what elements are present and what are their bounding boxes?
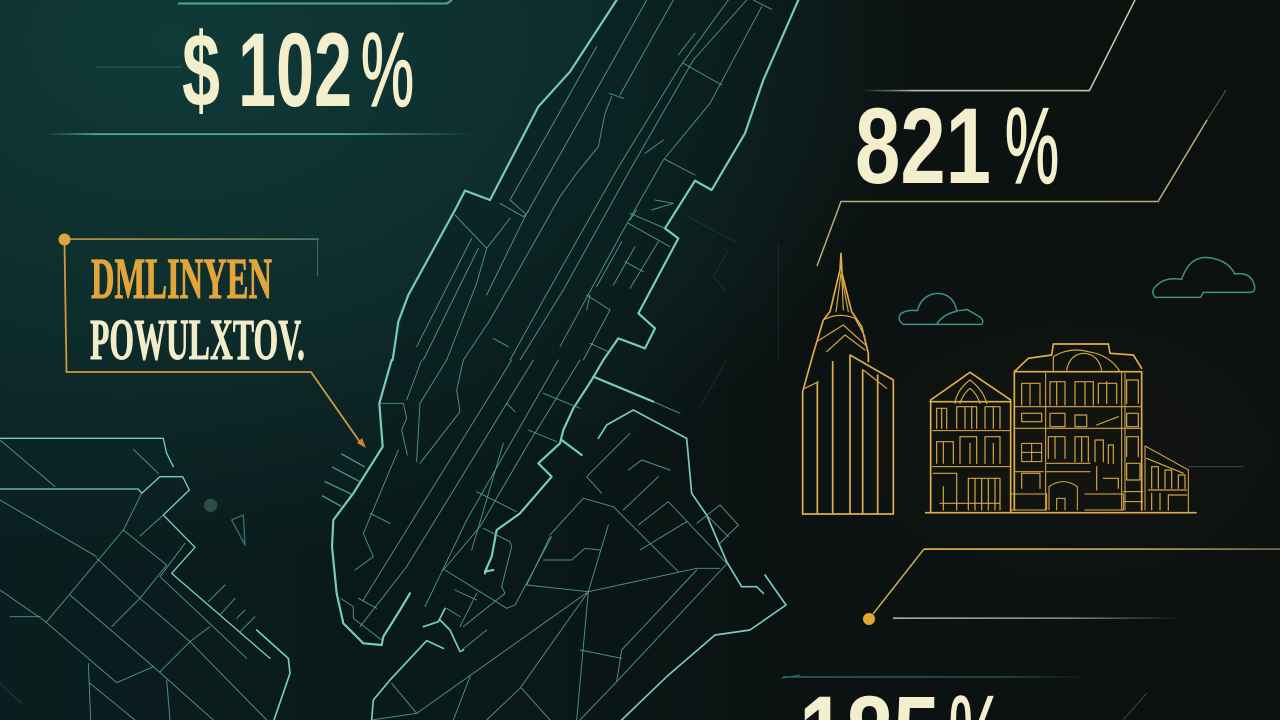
callout: population label: DMLINYEN (91, 246, 272, 311)
icon: skyscraper (803, 253, 893, 514)
top-left stat: dollar percent: $ (182, 12, 220, 129)
stat: bottom right percent (783, 673, 1147, 720)
icon: cloud right (1153, 257, 1255, 297)
icon: cloud left (899, 293, 983, 324)
callout: population label: POWULXTOV. (90, 307, 305, 372)
map: left district (0, 438, 290, 720)
callout: population label (58, 234, 366, 448)
connector: gold leader with dot (863, 548, 1280, 625)
map: Manhattan interior shade (333, 0, 798, 645)
top-left stat: dollar percent (45, 0, 475, 135)
map: lower Manhattan and Brooklyn (323, 360, 800, 720)
connector frame: top right (858, 0, 1135, 91)
stat: 821 percent: % (1005, 85, 1059, 206)
map: upper Manhattan (393, 0, 798, 360)
top-left stat: dollar percent: 102 (238, 12, 352, 129)
icon: city buildings (926, 344, 1243, 513)
stat: 821 percent: 821 (855, 85, 991, 206)
top-left stat: dollar percent: % (361, 12, 414, 129)
connector frame: under 821 percent (817, 90, 1226, 266)
